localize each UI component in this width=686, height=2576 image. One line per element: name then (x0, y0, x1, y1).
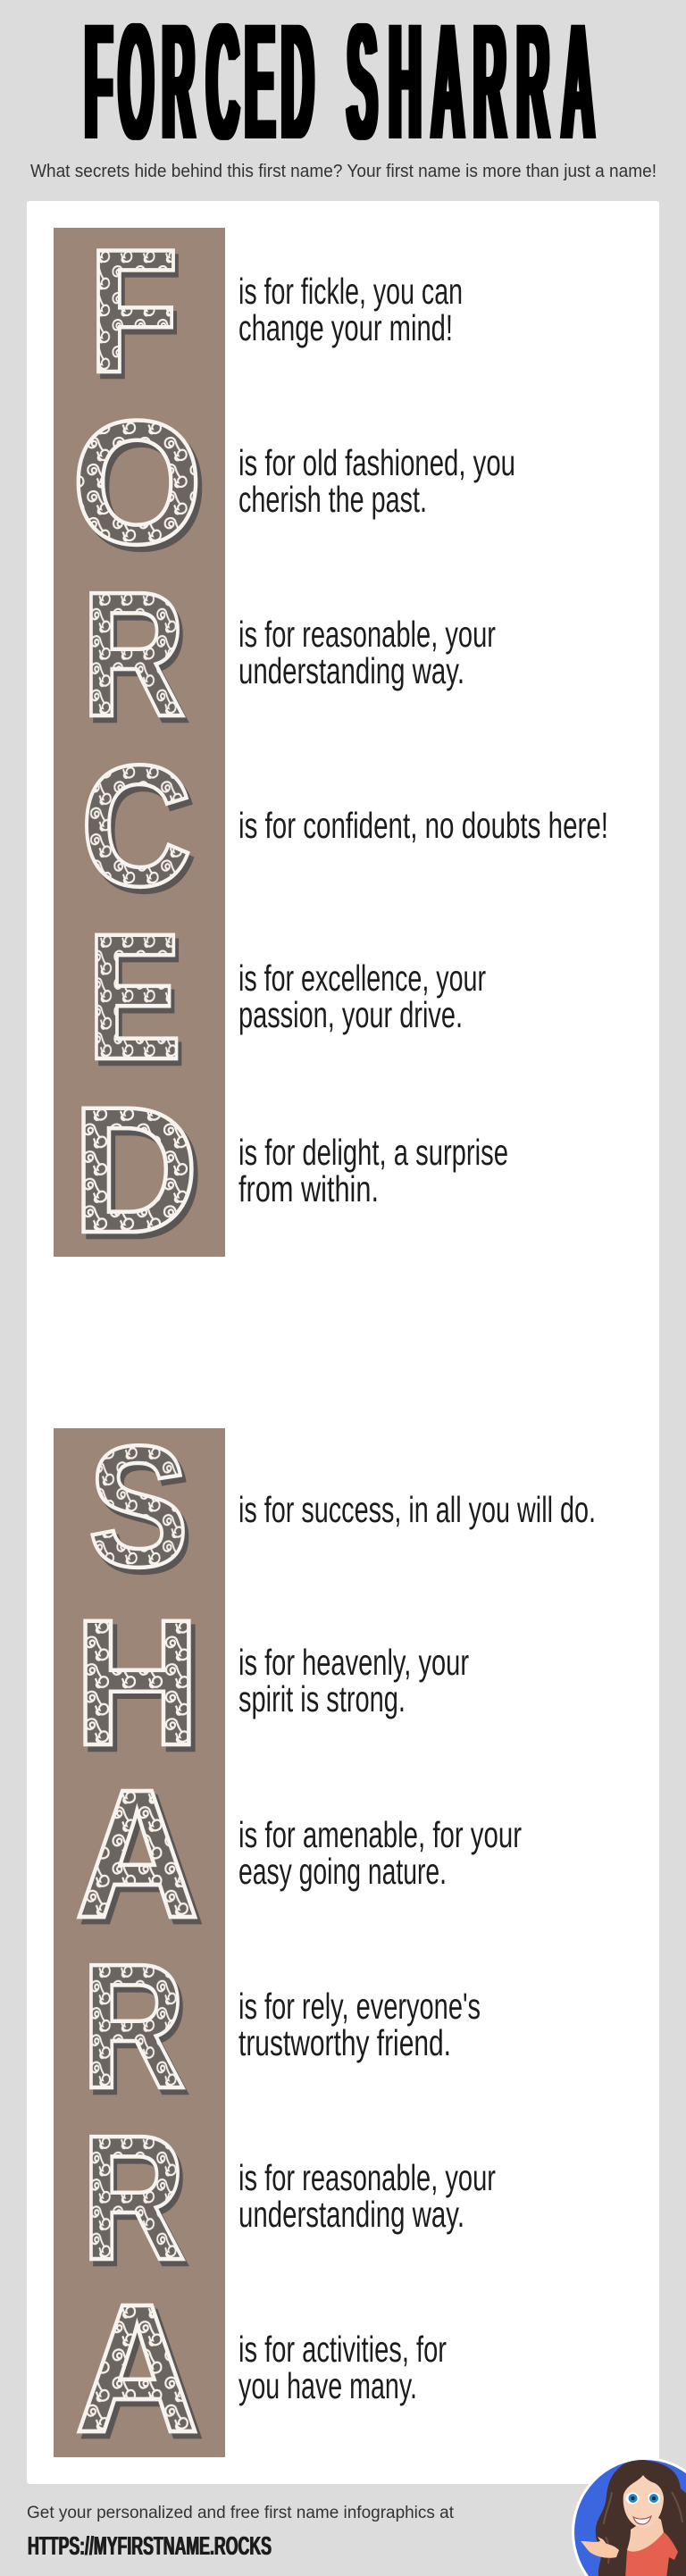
text: R meaning: understanding way. (238, 650, 464, 691)
letter A: A (75, 1752, 199, 1956)
letter R: R (81, 2099, 186, 2297)
letter C: C (80, 729, 192, 922)
row: R second (81, 1928, 481, 2126)
text: A meaning: is for amenable, for your (238, 1814, 522, 1855)
text: F meaning: change your mind! (238, 307, 453, 348)
footer text: call to action: Get your personalized and free first name infographics at (27, 2504, 455, 2522)
row: C (80, 729, 608, 922)
row: A second (75, 2267, 447, 2471)
text: D meaning: is for delight, a surprise (238, 1132, 508, 1173)
row: S (88, 1411, 596, 1602)
text: O meaning: cherish the past. (238, 479, 427, 520)
text: O meaning: is for old fashioned, you (238, 442, 515, 483)
text: R meaning: is for reasonable, your (238, 614, 496, 655)
letter S: S (88, 1411, 189, 1602)
letter D: D (71, 1070, 199, 1270)
letter O: O (71, 383, 203, 581)
letter E: E (87, 897, 182, 1097)
row: O (71, 383, 515, 581)
text: A meaning: easy going nature. (238, 1851, 447, 1892)
text: A meaning: you have many. (238, 2365, 417, 2406)
row: A (75, 1752, 522, 1956)
row: F (88, 212, 463, 409)
text: R meaning: is for reasonable, your (238, 2157, 496, 2198)
letter R: R (81, 1928, 186, 2126)
text: H meaning: is for heavenly, your (238, 1642, 469, 1683)
icon: avatar of woman in blue circle (572, 2457, 686, 2576)
row: R third (81, 2099, 496, 2297)
row: H (73, 1583, 469, 1783)
text: F meaning: is for fickle, you can (238, 271, 463, 312)
row: D (71, 1070, 508, 1270)
footer text: website url: HTTPS://MYFIRSTNAME.ROCKS (28, 2532, 272, 2561)
text: E meaning: passion, your drive. (238, 994, 463, 1035)
letter R: R (81, 556, 186, 754)
text: D meaning: from within. (238, 1168, 379, 1209)
letter H: H (73, 1583, 201, 1783)
panel: SHARRA letter column (54, 1428, 225, 2457)
text: R meaning: trustworthy friend. (238, 2022, 451, 2063)
text: H meaning: spirit is strong. (238, 1678, 406, 1719)
panel: FORCED letter column (54, 228, 225, 1257)
text: E meaning: is for excellence, your (238, 958, 486, 999)
text: A meaning: is for activities, for (238, 2329, 447, 2370)
letter A: A (75, 2267, 199, 2471)
row: R (81, 556, 496, 754)
row: E (87, 897, 486, 1097)
subtitle: What secrets hide behind this first name? Your first name is more than just a name! (30, 162, 657, 181)
letter F: F (88, 212, 179, 409)
text: R meaning: is for rely, everyone's (238, 1986, 481, 2027)
text: R meaning: understanding way. (238, 2194, 464, 2235)
